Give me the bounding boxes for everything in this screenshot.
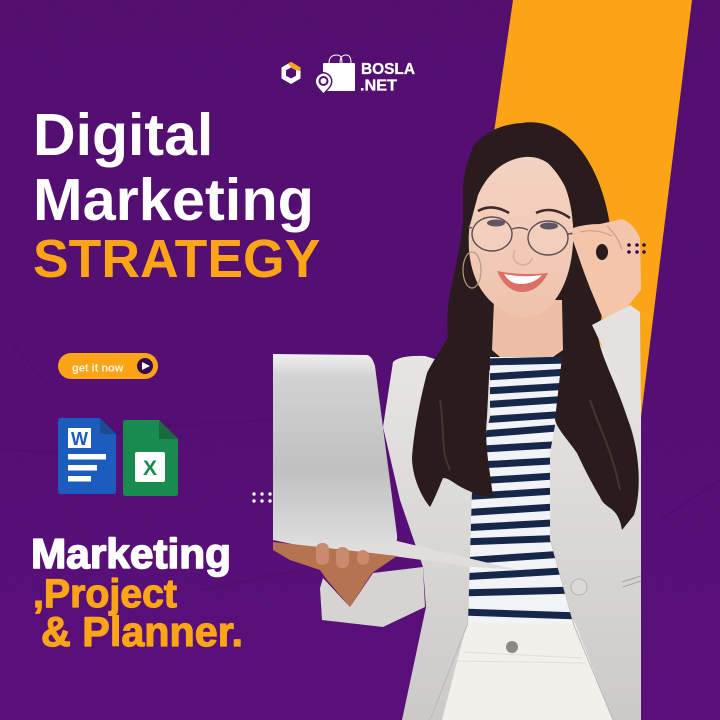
slogan <box>31 530 243 655</box>
smile <box>497 271 548 292</box>
icon: shopping bag with pin <box>314 55 355 94</box>
hair <box>412 122 639 530</box>
title <box>33 102 320 289</box>
icon: Word document: W <box>71 429 88 449</box>
blazer <box>383 340 641 720</box>
jacket sleeve, raised arm <box>592 305 641 400</box>
hair highlights <box>440 400 620 490</box>
photo: woman with laptop <box>273 122 641 720</box>
striped shirt <box>468 357 573 623</box>
hand under laptop <box>273 542 397 607</box>
icon: Word document <box>58 418 116 494</box>
icon: Excel document: X <box>143 457 157 480</box>
neck <box>492 300 563 357</box>
logo wordmark: .NET <box>360 78 397 94</box>
button: get it now <box>58 353 158 379</box>
raised hand <box>572 219 641 319</box>
decorative white dots <box>252 492 272 503</box>
title line: Digital: Digital <box>33 102 213 168</box>
slogan line: Planner: & Planner. <box>41 608 243 655</box>
laptop base <box>273 540 518 570</box>
icon: Excel document <box>123 420 178 496</box>
hoop earring <box>463 252 481 288</box>
jacket sleeve, extended arm <box>320 567 425 627</box>
white trousers <box>442 623 613 720</box>
face <box>469 157 573 317</box>
title line: STRATEGY: STRATEGY <box>33 230 320 289</box>
decorative dark dots <box>627 243 646 254</box>
brand logo <box>282 55 415 94</box>
glasses <box>468 217 575 255</box>
eyes and brows <box>478 207 570 230</box>
slogan line: Marketing: Marketing <box>31 530 231 577</box>
title line: Marketing: Marketing <box>33 166 314 233</box>
laptop lid <box>273 354 397 547</box>
slogan line: Project: ,Project <box>33 572 177 616</box>
nose shadow <box>514 250 532 265</box>
orange diagonal band <box>470 0 692 417</box>
button and waist detail <box>430 540 641 720</box>
logo wordmark: BOSLA <box>361 61 415 78</box>
button: get it now: get it now <box>72 362 124 374</box>
icon: hexagon mark <box>282 62 300 84</box>
hair parting <box>470 163 566 225</box>
